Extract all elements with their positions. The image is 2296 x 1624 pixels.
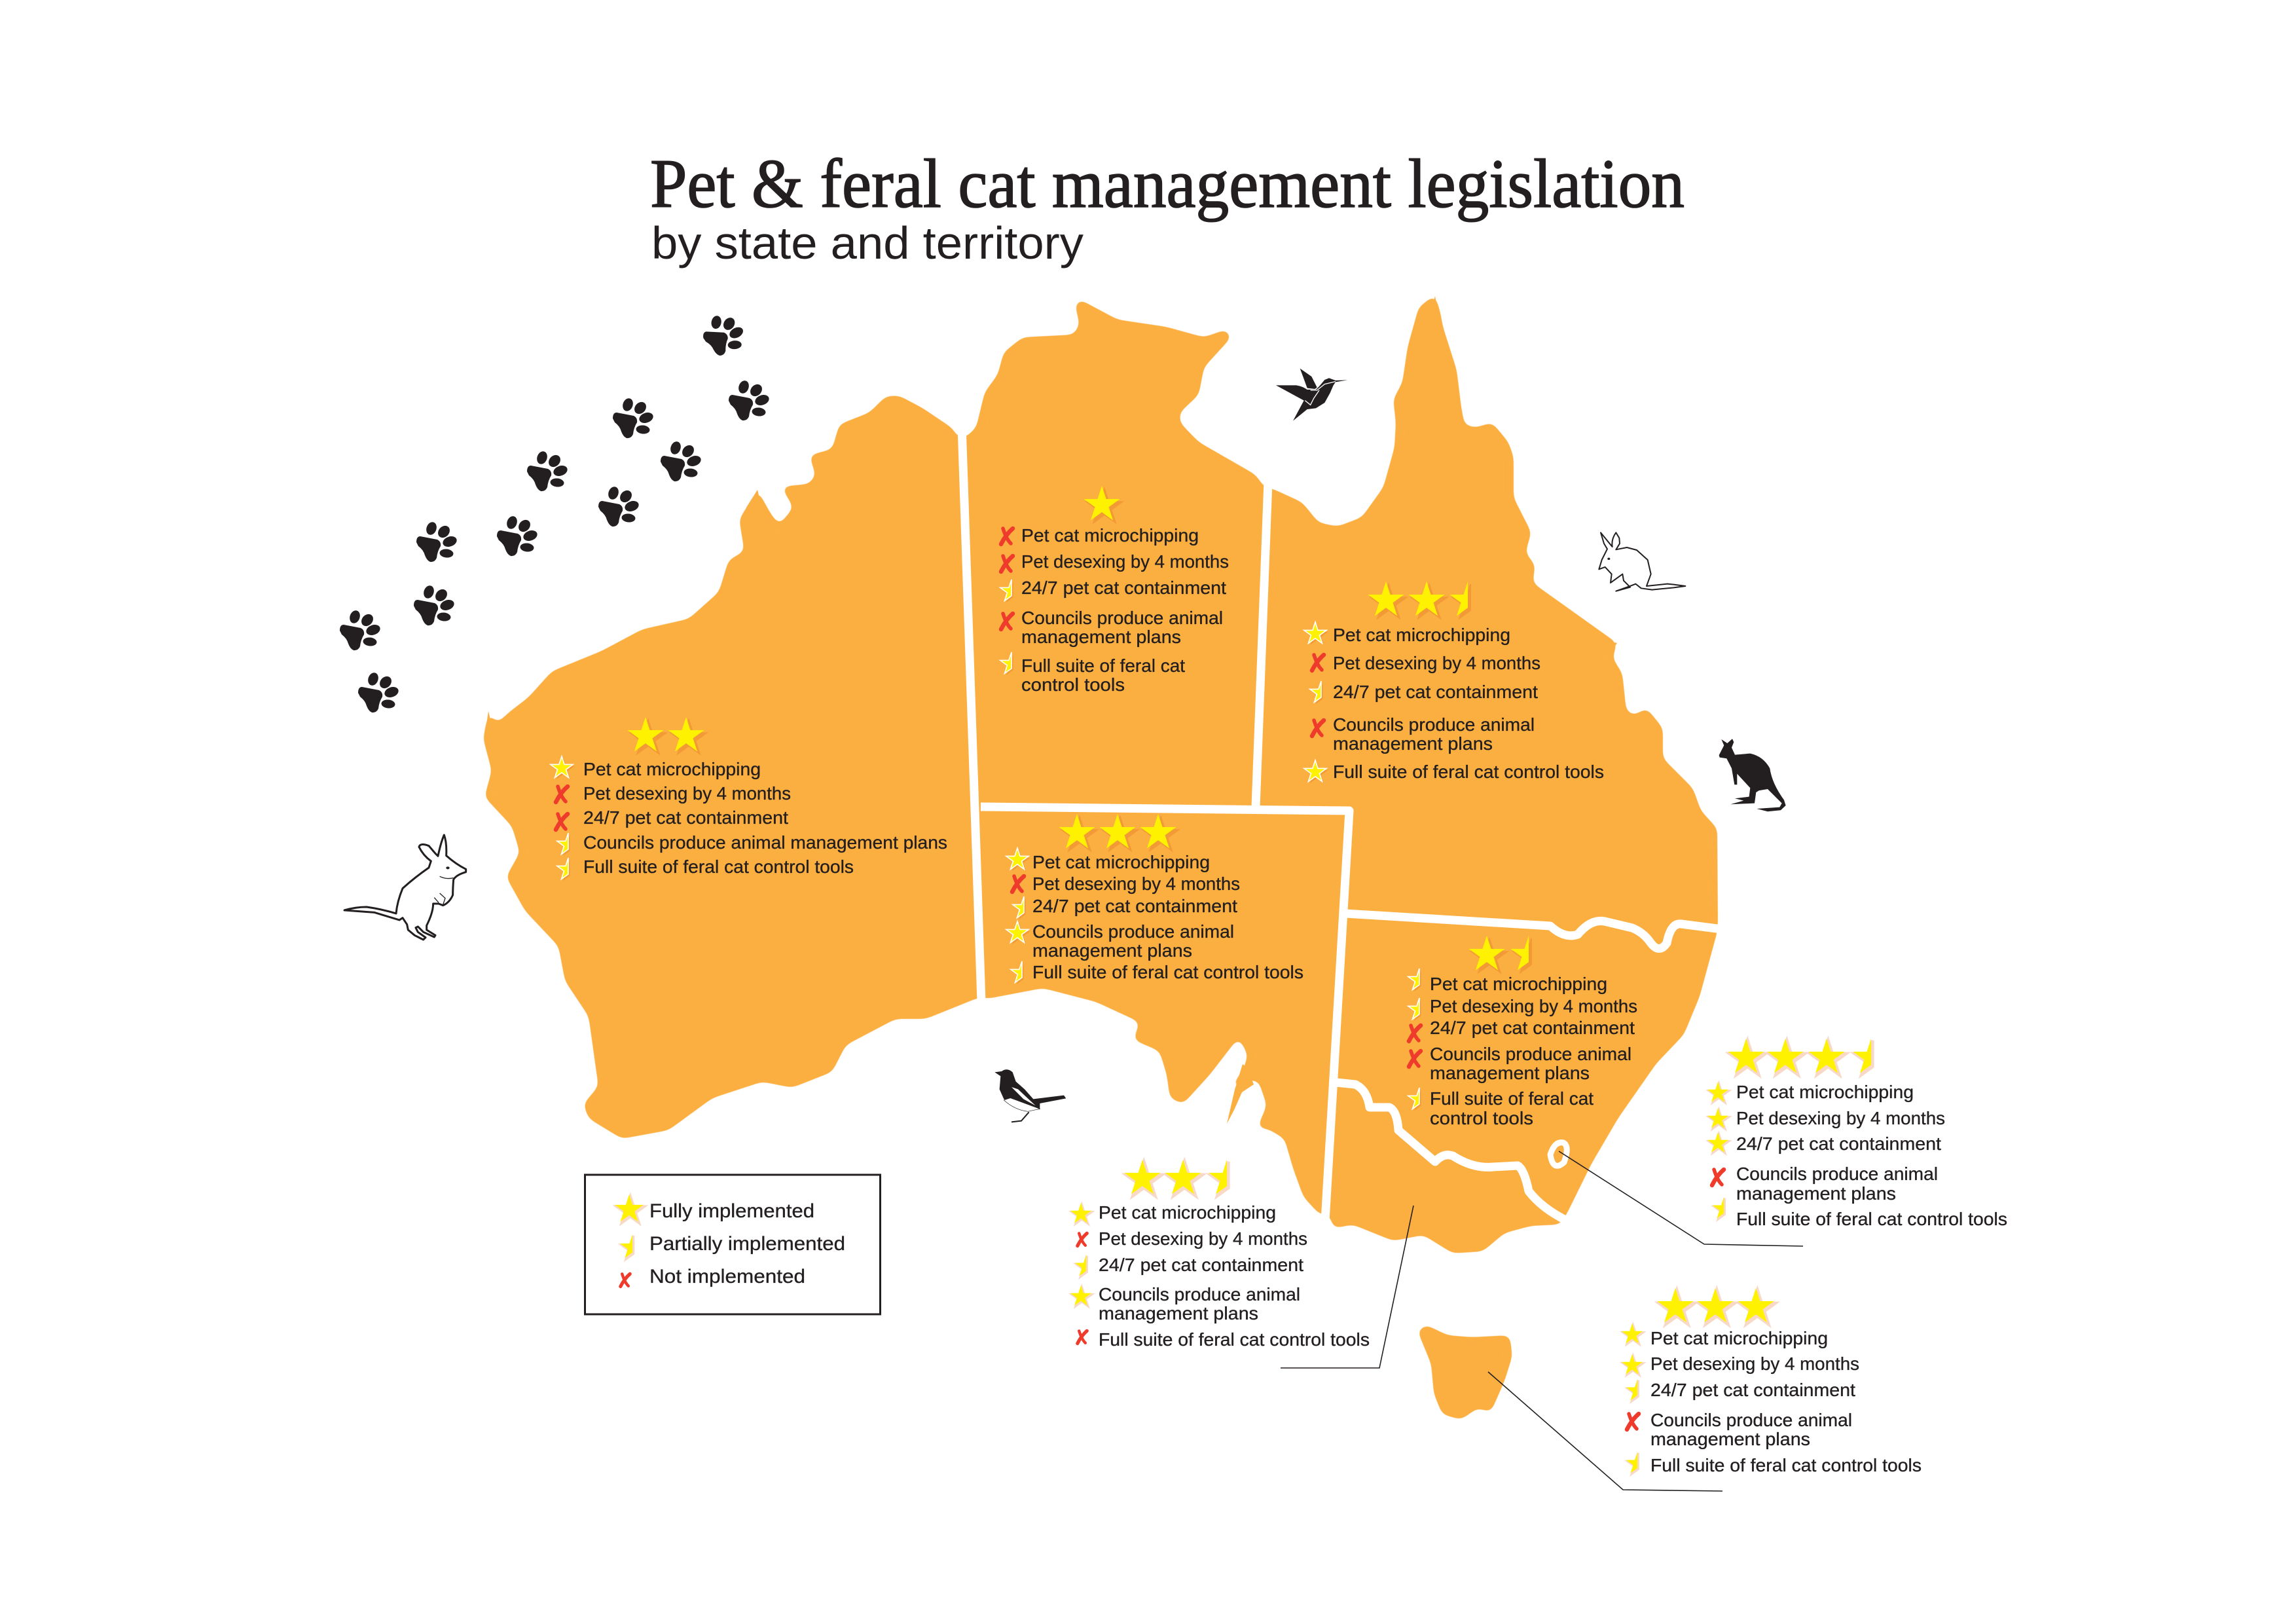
item: cross: Councils produce animal xyxy=(1021,608,1223,628)
item: half star: Councils produce animal management plans xyxy=(583,832,947,853)
item: full star: Pet cat microchipping xyxy=(1736,1082,1914,1102)
title: Pet & feral cat management legislation xyxy=(650,145,1685,222)
legend item: not implemented: Not implemented xyxy=(649,1266,805,1287)
item: full star: Councils produce animal xyxy=(1032,921,1234,942)
item: full star: Councils produce animal xyxy=(1099,1284,1300,1304)
item: half star: 24/7 pet cat containment xyxy=(1333,682,1538,702)
item: cross xyxy=(1712,1164,1938,1204)
item: cross xyxy=(1001,608,1223,647)
rating stars xyxy=(1657,1288,1776,1324)
legend item: fully implemented xyxy=(615,1194,814,1223)
item: full star: management plans xyxy=(1099,1303,1258,1323)
item: half star: 24/7 pet cat containment xyxy=(1099,1255,1303,1275)
panel: Queensland xyxy=(1304,581,1604,783)
rating stars xyxy=(1468,936,1531,973)
item: cross: management plans xyxy=(1333,733,1493,754)
item: full star: Pet cat microchipping xyxy=(583,759,761,779)
item: cross xyxy=(1409,1044,1631,1083)
item: cross: Councils produce animal xyxy=(1650,1410,1852,1430)
panel: Western Australia xyxy=(551,717,947,881)
item: full star: management plans xyxy=(1032,940,1192,961)
item: full star: Full suite of feral cat control tools xyxy=(1333,762,1604,782)
item: cross: Councils produce animal xyxy=(1430,1044,1631,1064)
panel: Australian Capital Territory xyxy=(1707,1039,2007,1229)
item: cross: Pet desexing by 4 months xyxy=(1032,874,1240,894)
item: half star: Full suite of feral cat control tools xyxy=(1650,1455,1922,1475)
item: full star: Pet cat microchipping xyxy=(1333,625,1510,645)
item: cross: Pet desexing by 4 months xyxy=(1099,1228,1307,1249)
icon: small bilby xyxy=(1599,532,1685,591)
item: cross: 24/7 pet cat containment xyxy=(1430,1018,1635,1038)
legend item: partially implemented xyxy=(620,1233,845,1259)
item: half star: Full suite of feral cat control tools xyxy=(583,857,854,877)
icon: cat paw prints xyxy=(340,311,771,712)
item: cross: Pet desexing by 4 months xyxy=(1333,653,1540,673)
item: half star: 24/7 pet cat containment xyxy=(1021,578,1226,598)
panel: New South Wales xyxy=(1408,936,1637,1128)
item: half star xyxy=(1408,1088,1594,1128)
item: half star: 24/7 pet cat containment xyxy=(1032,896,1237,916)
legend item: partially implemented: Partially implemented xyxy=(649,1233,845,1255)
item: cross: 24/7 pet cat containment xyxy=(583,807,788,828)
icon: bilby standing xyxy=(344,835,466,940)
item: cross: Pet desexing by 4 months xyxy=(583,783,791,803)
item: half star: control tools xyxy=(1430,1108,1533,1128)
rating stars xyxy=(627,717,707,754)
state borders xyxy=(962,426,1722,1221)
item: half star: 24/7 pet cat containment xyxy=(1650,1380,1855,1400)
item: half star: Full suite of feral cat xyxy=(1430,1088,1594,1109)
item: full star: Pet cat microchipping xyxy=(1032,852,1210,872)
map: Australian mainland and Tasmania xyxy=(483,295,1718,1420)
item: half star xyxy=(1000,652,1185,695)
rating stars xyxy=(1059,814,1179,851)
item: full star: Pet desexing by 4 months xyxy=(1650,1354,1859,1374)
legend xyxy=(585,1175,880,1314)
item: half star: control tools xyxy=(1021,674,1125,695)
item: cross: management plans xyxy=(1021,627,1181,647)
item: cross: Councils produce animal xyxy=(1333,714,1535,735)
item: full star: Pet desexing by 4 months xyxy=(1736,1108,1945,1128)
item: cross: management plans xyxy=(1650,1429,1810,1449)
rating stars xyxy=(1084,486,1123,523)
item: half star: Pet desexing by 4 months xyxy=(1430,996,1637,1016)
item: full star xyxy=(1622,1323,1828,1348)
item: cross: Full suite of feral cat control tools xyxy=(1099,1329,1370,1350)
leader lines xyxy=(1281,1151,1803,1491)
item: full star: 24/7 pet cat containment xyxy=(1736,1134,1941,1154)
panel: Tasmania xyxy=(1622,1288,1922,1475)
item: cross: management plans xyxy=(1736,1183,1896,1204)
rating stars xyxy=(1728,1039,1872,1075)
item: cross xyxy=(1627,1410,1852,1449)
item: full star: Pet cat microchipping xyxy=(1650,1328,1828,1348)
item: half star: Full suite of feral cat control tools xyxy=(1032,962,1303,982)
item: half star xyxy=(1713,1197,2007,1229)
panel: Victoria xyxy=(1070,1160,1370,1350)
item: cross: management plans xyxy=(1430,1063,1590,1083)
item: cross xyxy=(1312,714,1535,754)
icon: hummingbird xyxy=(1276,369,1347,421)
item: full star xyxy=(1070,1284,1300,1323)
item: cross: Pet cat microchipping xyxy=(1021,525,1199,545)
icon: magpie xyxy=(994,1069,1066,1122)
rating stars xyxy=(1368,581,1470,619)
panel: South Australia xyxy=(1006,814,1303,984)
item: cross: Pet desexing by 4 months xyxy=(1021,551,1229,572)
item: half star: Full suite of feral cat control tools xyxy=(1736,1209,2007,1229)
item: half star xyxy=(1408,969,1607,994)
item: full star xyxy=(1006,921,1234,961)
panel: Northern Territory xyxy=(1000,486,1229,695)
legend item: fully implemented: Fully implemented xyxy=(649,1200,814,1222)
item: full star: Pet cat microchipping xyxy=(1099,1202,1276,1223)
item: cross: Councils produce animal xyxy=(1736,1164,1938,1184)
subtitle: by state and territory xyxy=(651,217,1084,268)
item: half star: Pet cat microchipping xyxy=(1430,974,1607,994)
rating stars xyxy=(1124,1160,1228,1196)
icon: kangaroo xyxy=(1719,739,1786,811)
item: half star: Full suite of feral cat xyxy=(1021,655,1185,676)
